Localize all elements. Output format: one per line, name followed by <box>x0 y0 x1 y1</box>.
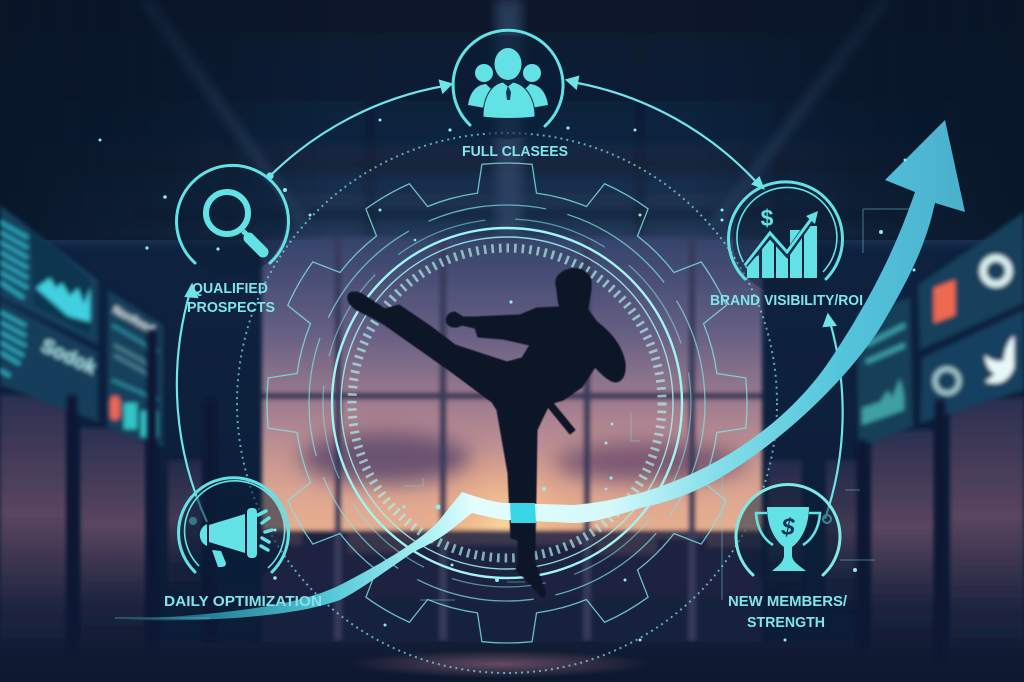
arc: full classes to brand visibility <box>567 77 763 188</box>
left wall screens: Sodok <box>38 335 100 379</box>
icon: trophy: $ <box>780 514 795 541</box>
left wall screens: Nonfood <box>111 304 156 336</box>
label: qualified prospects: PROSPECTS <box>187 300 275 316</box>
inner segmented rings <box>309 205 705 601</box>
icon: trophy <box>736 485 840 586</box>
arc: qualified prospects to full classes <box>268 81 451 178</box>
tick ring <box>352 248 662 558</box>
particles and thin HUD lines <box>98 118 916 642</box>
label: full classes: FULL CLASEES <box>462 144 568 160</box>
icon: megaphone <box>179 478 289 585</box>
structural columns <box>72 330 940 660</box>
central gear and HUD rings <box>237 133 777 673</box>
left wall screens <box>0 205 163 447</box>
label: qualified prospects <box>187 281 275 316</box>
rising growth arrow <box>120 120 965 620</box>
label: qualified prospects: QUALIFIED <box>192 281 268 297</box>
gear outline <box>267 163 747 643</box>
right wall screens <box>857 212 1024 448</box>
ceiling <box>0 0 1024 242</box>
icon: magnifying glass <box>177 165 288 276</box>
label: new members / strength: NEW MEMBERS/ <box>728 594 847 610</box>
label: daily optimization: DAILY OPTIMIZATION <box>164 594 322 610</box>
label: new members / strength: STRENGTH <box>747 615 825 631</box>
side windows <box>0 395 1024 660</box>
side vignette over ceiling <box>0 0 1024 240</box>
floor <box>0 642 1024 682</box>
cycle arcs with arrowheads <box>177 77 843 524</box>
arc: new members to brand visibility <box>823 315 843 523</box>
dotted outer ring <box>237 133 777 673</box>
icon: full classes people <box>453 30 563 139</box>
label: brand visibility: BRAND VISIBILITY/ROI <box>710 293 863 309</box>
main rings <box>332 228 682 578</box>
icon: brand growth chart <box>728 182 842 294</box>
icon: brand growth chart: $ <box>761 205 774 231</box>
arc: daily optimization to qualified prospects <box>177 285 207 524</box>
silhouette: martial artist kicking <box>348 269 625 597</box>
arrow crossing the leg <box>510 503 536 523</box>
central sunset window <box>262 236 762 647</box>
label: new members / strength <box>728 594 847 631</box>
